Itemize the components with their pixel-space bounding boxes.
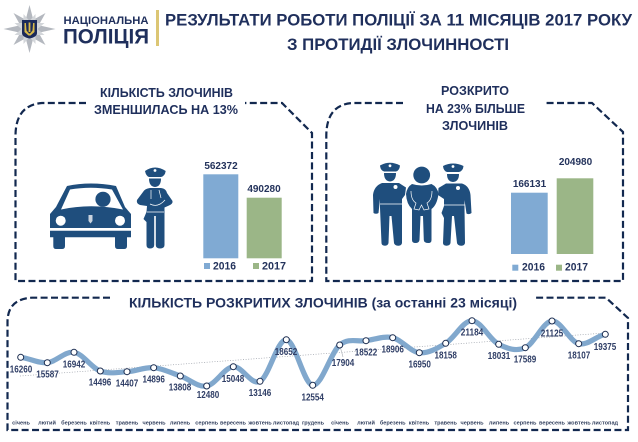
data labels: 16950 <box>408 360 431 371</box>
header <box>4 5 632 54</box>
panel: crimes decreased <box>16 85 312 281</box>
legend 2017: 2017 <box>565 262 588 274</box>
title line 1: РЕЗУЛЬТАТИ РОБОТИ ПОЛІЦІЇ ЗА 11 МІСЯЦІВ 2017 РОКУ <box>165 11 632 30</box>
data labels: 19375 <box>594 342 617 353</box>
month axis labels: липень <box>170 420 191 426</box>
title line 2: З ПРОТИДІЇ ЗЛОЧИННОСТІ <box>287 35 509 54</box>
month axis labels <box>12 419 619 426</box>
month axis labels: червень <box>142 420 166 426</box>
panel heading: ЗЛОЧИНІВ <box>442 118 508 133</box>
legend 2017: 2017 <box>262 260 286 272</box>
month axis labels: грудень <box>302 420 325 426</box>
icon: police officer with notepad <box>137 168 173 248</box>
data labels: 18906 <box>381 345 404 356</box>
data labels: 17904 <box>332 358 355 369</box>
data labels: 16942 <box>63 360 86 371</box>
logo divider <box>156 10 159 46</box>
value 2017: 204980 <box>559 157 593 168</box>
month axis labels: лютий <box>357 419 375 426</box>
month axis labels: лютий <box>38 419 56 426</box>
data labels: 18031 <box>488 351 511 362</box>
month axis labels: вересень <box>539 420 566 426</box>
legend 2016: 2016 <box>522 262 545 274</box>
logo text: ПОЛІЦІЯ: ПОЛІЦІЯ <box>63 26 149 48</box>
panel heading: ЗМЕНШИЛАСЬ НА 13% <box>94 102 238 117</box>
data labels: 21184 <box>461 328 484 339</box>
line chart <box>10 318 619 426</box>
month axis labels: вересень <box>220 420 247 426</box>
value 2016: 562372 <box>204 161 238 172</box>
right officer <box>438 164 472 246</box>
month axis labels: травень <box>434 420 458 426</box>
month axis labels: серпень <box>514 420 537 426</box>
value 2016: 166131 <box>513 179 547 190</box>
left officer <box>373 163 406 246</box>
month axis labels: серпень <box>195 420 219 426</box>
month axis labels: квітень <box>409 420 430 426</box>
detainee <box>406 167 438 243</box>
panel: crimes solved <box>326 83 623 281</box>
bar 2017 <box>557 178 593 254</box>
month axis labels: квітень <box>90 420 111 426</box>
panel frame <box>8 298 628 430</box>
month axis labels: липень <box>489 420 510 426</box>
month axis labels: березень <box>61 419 87 426</box>
icon: two officers with detainee <box>373 163 472 246</box>
data labels: 18107 <box>568 351 591 362</box>
month axis labels: травень <box>116 420 139 426</box>
data labels: 17589 <box>514 355 537 366</box>
panel heading: КІЛЬКІСТЬ РОЗКРИТИХ ЗЛОЧИНІВ (за останні 23 місяці) <box>129 295 517 311</box>
data labels: 18522 <box>355 348 378 359</box>
month axis labels: жовтень <box>566 420 591 426</box>
month axis labels: січень <box>12 420 30 426</box>
month axis labels: червень <box>460 420 484 426</box>
panel frame <box>16 103 312 281</box>
data markers <box>18 318 608 389</box>
data labels: 13808 <box>169 383 192 394</box>
panel: solved crimes line chart <box>8 295 628 430</box>
bar 2017 <box>247 198 282 258</box>
data labels: 14496 <box>89 378 112 389</box>
data labels: 18158 <box>434 351 457 362</box>
month axis labels: жовтень <box>247 420 272 426</box>
bar 2016 <box>203 174 238 258</box>
logo text: НАЦІОНАЛЬНА: НАЦІОНАЛЬНА <box>64 15 149 27</box>
data labels: 15048 <box>222 374 245 385</box>
data labels: 14407 <box>116 379 139 390</box>
month axis labels: листопад <box>592 420 619 426</box>
data labels <box>10 328 617 404</box>
month axis labels: січень <box>331 420 349 426</box>
bar chart: solved <box>511 157 593 274</box>
data labels: 13146 <box>249 388 272 399</box>
panel heading: РОЗКРИТО <box>441 83 509 98</box>
data labels: 12554 <box>301 393 324 404</box>
data labels: 12480 <box>197 390 220 401</box>
icon: police car <box>50 184 131 249</box>
panel heading: КІЛЬКІСТЬ ЗЛОЧИНІВ <box>100 85 233 100</box>
icon: police star logo <box>4 5 56 53</box>
data labels: 16260 <box>10 365 33 376</box>
month axis labels: березень <box>380 419 406 426</box>
panel heading: НА 23% БІЛЬШЕ <box>426 101 525 116</box>
data labels: 15587 <box>36 370 59 381</box>
bar 2016 <box>511 193 548 254</box>
data labels: 14896 <box>142 375 165 386</box>
panel frame <box>326 103 623 281</box>
bar chart: crimes <box>203 161 286 272</box>
legend 2016: 2016 <box>213 260 236 272</box>
data line <box>21 321 605 386</box>
data labels: 21125 <box>541 329 564 340</box>
month axis labels: листопад <box>273 420 300 426</box>
data labels: 18652 <box>275 347 298 358</box>
value 2017: 490280 <box>247 184 281 195</box>
